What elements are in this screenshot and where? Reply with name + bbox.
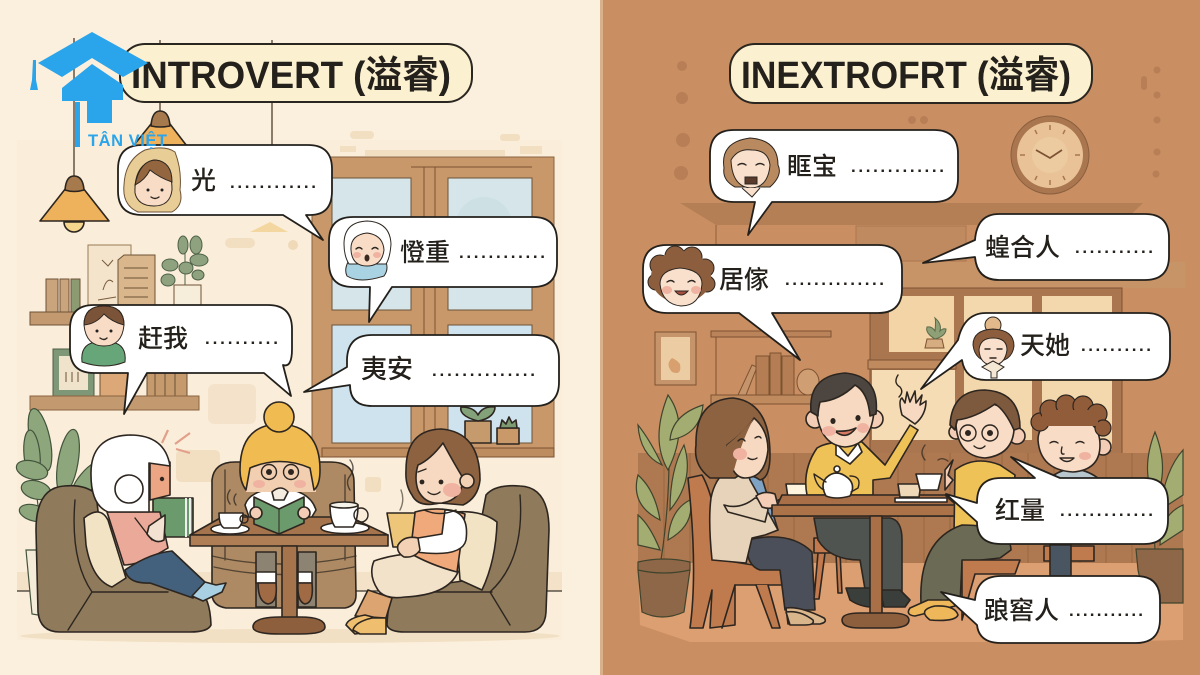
window plants (461, 407, 519, 444)
plant: left (14, 407, 110, 616)
person: woman with drink (346, 429, 497, 634)
shelf: lower with frame and books (30, 349, 199, 410)
speech bubble: 居傢 (643, 245, 902, 360)
speech bubble: 踉窖人 (941, 576, 1160, 643)
lamp: centre (130, 40, 288, 232)
avatar: green sweater (82, 306, 125, 366)
speech bubble: 夷安 (304, 335, 559, 406)
logo: Tan Viet: TÂN VIỆT (88, 131, 167, 150)
background: window (868, 288, 1122, 458)
person: yellow hat reader (240, 402, 320, 607)
speech bubble: 红量: ............. (1060, 501, 1153, 520)
speech bubble: 蝗合人: 蝗合人 (985, 234, 1060, 262)
speech bubble: 眶宝: ............. (851, 157, 944, 176)
speech bubble: 天她: 天她 (1020, 332, 1070, 360)
speech bubble: 光 (118, 145, 332, 240)
background: shelves with books (655, 331, 831, 404)
table and teapot: right (772, 445, 969, 628)
avatar: laughing woman (724, 138, 779, 197)
avatar: curly hair woman (648, 246, 715, 306)
person: woman with tea (688, 398, 825, 628)
speech bubble: 憕重: 憕重 (400, 239, 450, 267)
sofa: centre (212, 462, 356, 608)
background: wainscot (638, 453, 1183, 642)
sofa: right (387, 486, 549, 632)
speech bubble: 憕重: ............ (459, 243, 545, 262)
title: extrovert (730, 44, 1092, 103)
speech bubble: 赶我: .......... (205, 329, 278, 348)
person: man waving (806, 373, 926, 607)
title: introvert (120, 44, 472, 102)
speech bubble: 夷安: 夷安 (361, 354, 413, 384)
speech bubble: 踉窖人: 踉窖人 (984, 597, 1059, 625)
person: man with glasses (908, 390, 1025, 620)
table and cups: left (190, 460, 388, 634)
plant: right scene right (1136, 432, 1183, 603)
speech bubble: 赶我: 赶我 (138, 325, 188, 353)
speech bubble: 居傢: 居傢 (719, 266, 769, 294)
shelf: upper with books and plant (30, 236, 208, 325)
speech bubble: 光: 光 (191, 167, 216, 195)
speech bubble: 赶我 (70, 305, 292, 414)
title: introvert: INTROVERT (溢睿) (131, 55, 451, 97)
lamp: left (40, 38, 109, 232)
speech bubble: 憕重 (329, 217, 557, 322)
person: helmet reader (84, 430, 226, 601)
panel: introvert (0, 0, 600, 675)
speech bubble: 眶宝: 眶宝 (787, 153, 837, 181)
panel: extrovert (600, 0, 1200, 675)
clock (1011, 116, 1089, 194)
sofa: left (36, 486, 211, 632)
speech bubble: 踉窖人: ........... (1069, 601, 1143, 620)
speech bubble: 蝗合人 (923, 214, 1169, 280)
speech bubble: 光: ............ (230, 173, 316, 192)
speech bubble: 蝗合人: ........... (1075, 238, 1153, 257)
speech bubble: 红量: 红量 (995, 497, 1045, 525)
logo: Tan Viet (30, 32, 167, 150)
speech bubble: 红量 (946, 457, 1168, 544)
speech bubble: 天她: .......... (1081, 336, 1151, 355)
avatar: wavy hair (124, 148, 181, 212)
speech bubble: 居傢: .............. (785, 270, 884, 289)
avatar: white hood (344, 221, 391, 280)
background: shelf canopy (680, 203, 1185, 290)
title: extrovert: INEXTROFRT (溢睿) (741, 55, 1071, 97)
speech bubble: 天她 (921, 313, 1170, 389)
window (312, 157, 554, 457)
speech bubble: 夷安: .............. (432, 361, 535, 380)
avatar: man with bun (973, 317, 1014, 378)
person: curly hair boy (1031, 395, 1111, 580)
speech bubble: 眶宝 (710, 130, 958, 235)
plant: right scene left (636, 395, 703, 617)
